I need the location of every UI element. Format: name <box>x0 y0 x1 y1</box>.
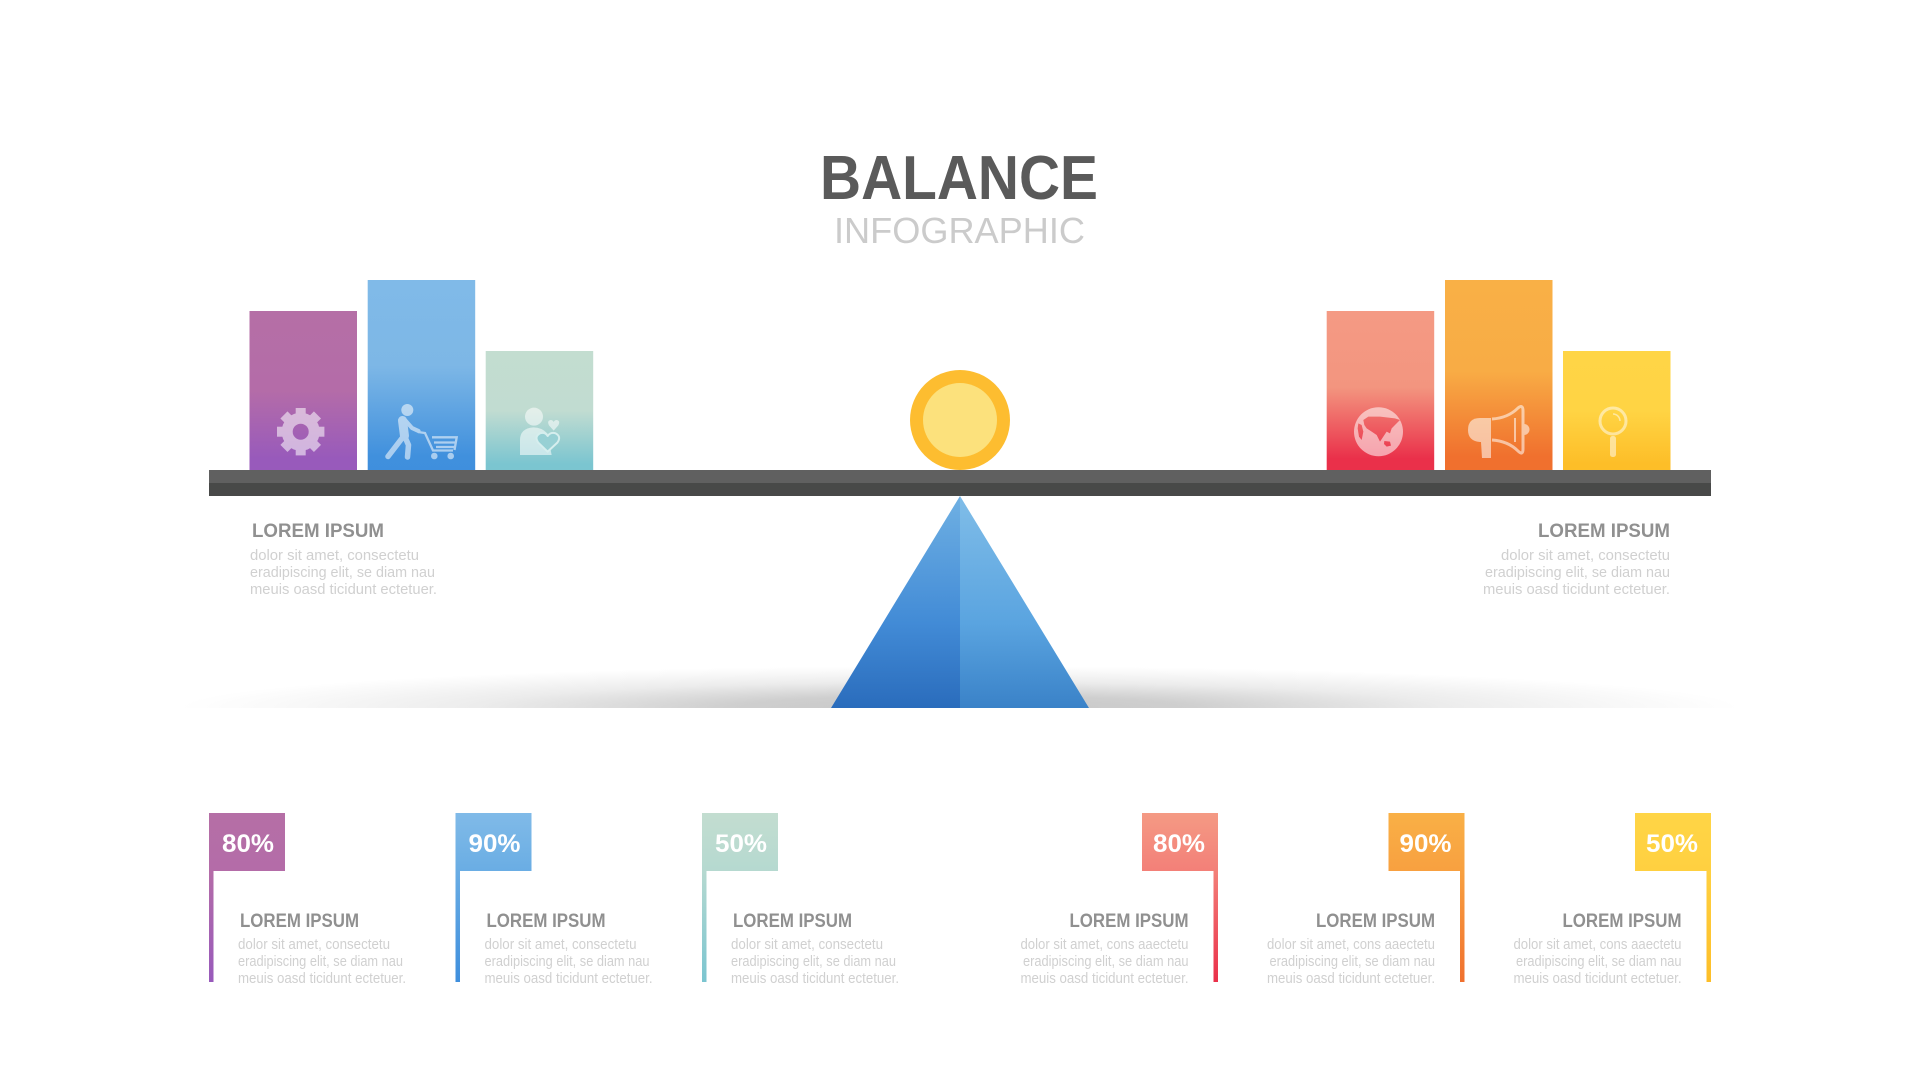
flag: teal 50%: dolor sit amet, consectetu <box>731 936 883 953</box>
flag: red 80%: dolor sit amet, cons aaectetu <box>1020 936 1188 953</box>
flag: purple 80%: 80% <box>222 830 274 858</box>
red bar with globe icon <box>1327 311 1434 470</box>
right description: dolor sit amet, consectetu <box>1501 547 1670 564</box>
left description: LOREM IPSUM <box>252 521 384 542</box>
flag: purple 80%: LOREM IPSUM <box>240 911 359 932</box>
right description: eradipiscing elit, se diam nau <box>1485 564 1670 581</box>
left bar group <box>250 280 593 470</box>
left description <box>250 521 437 598</box>
icon: person pushing cart <box>388 404 457 459</box>
flag: teal 50% <box>702 813 899 987</box>
flag: orange 90% <box>1267 813 1464 987</box>
left description: dolor sit amet, consectetu <box>250 547 419 564</box>
flag: yellow 50% <box>1514 813 1711 987</box>
flag: yellow 50%: LOREM IPSUM <box>1562 911 1682 932</box>
title: BALANCE <box>820 144 1098 213</box>
seesaw fulcrum triangle <box>831 496 1089 708</box>
flag: orange 90%: eradipiscing elit, se diam nau <box>1270 953 1435 970</box>
ground shadow <box>314 674 1606 708</box>
flag: purple 80%: eradipiscing elit, se diam nau <box>238 953 403 970</box>
flag: red 80%: LOREM IPSUM <box>1070 911 1188 932</box>
right bar group <box>1327 280 1670 470</box>
flag: red 80%: 80% <box>1153 830 1205 858</box>
balance ball <box>910 370 1010 470</box>
flag: red 80%: eradipiscing elit, se diam nau <box>1023 953 1188 970</box>
balance infographic canvas <box>209 156 1711 983</box>
flag: teal 50%: LOREM IPSUM <box>733 911 852 932</box>
teal bar with care icon <box>486 351 593 470</box>
flag: blue 90% <box>456 813 652 987</box>
flag: teal 50%: 50% <box>715 830 767 858</box>
left description: eradipiscing elit, se diam nau <box>250 564 435 581</box>
flag: purple 80%: meuis oasd ticidunt ectetuer. <box>238 970 406 987</box>
subtitle: INFOGRAPHIC <box>834 210 1085 251</box>
flag: blue 90%: 90% <box>468 830 520 858</box>
icon: megaphone <box>1468 407 1530 458</box>
flag: yellow 50%: 50% <box>1646 830 1698 858</box>
flag: blue 90%: dolor sit amet, consectetu <box>484 936 636 953</box>
flag: teal 50%: meuis oasd ticidunt ectetuer. <box>731 970 899 987</box>
title <box>820 144 1098 251</box>
icon: person with hearts <box>520 408 559 455</box>
right description: meuis oasd ticidunt ectetuer. <box>1483 581 1670 598</box>
flag: purple 80%: dolor sit amet, consectetu <box>238 936 390 953</box>
flag: orange 90%: dolor sit amet, cons aaectetu <box>1267 936 1435 953</box>
right description: LOREM IPSUM <box>1538 521 1670 542</box>
flag: blue 90%: meuis oasd ticidunt ectetuer. <box>484 970 652 987</box>
orange bar with megaphone icon <box>1445 280 1552 470</box>
seesaw beam <box>209 470 1711 496</box>
flag: red 80% <box>1020 813 1218 987</box>
flag: orange 90%: LOREM IPSUM <box>1316 911 1435 932</box>
flag: orange 90%: meuis oasd ticidunt ectetuer. <box>1267 970 1435 987</box>
icon: gear <box>277 408 324 455</box>
flag: yellow 50%: dolor sit amet, cons aaectetu <box>1514 936 1682 953</box>
purple bar with gear icon <box>250 311 357 470</box>
yellow bar with magnifier icon <box>1563 351 1670 470</box>
right description <box>1483 521 1670 598</box>
flag: orange 90%: 90% <box>1400 830 1452 858</box>
icon: magnifier <box>1600 408 1626 457</box>
blue bar with shopper icon <box>368 280 475 470</box>
flag: blue 90%: eradipiscing elit, se diam nau <box>484 953 650 970</box>
flag: yellow 50%: meuis oasd ticidunt ectetuer. <box>1514 970 1682 987</box>
icon: globe <box>1354 407 1403 456</box>
flag: yellow 50%: eradipiscing elit, se diam nau <box>1516 953 1682 970</box>
flag: purple 80% <box>209 813 406 987</box>
flag: blue 90%: LOREM IPSUM <box>486 911 606 932</box>
left description: meuis oasd ticidunt ectetuer. <box>250 581 437 598</box>
flag: teal 50%: eradipiscing elit, se diam nau <box>731 953 896 970</box>
flag: red 80%: meuis oasd ticidunt ectetuer. <box>1020 970 1188 987</box>
